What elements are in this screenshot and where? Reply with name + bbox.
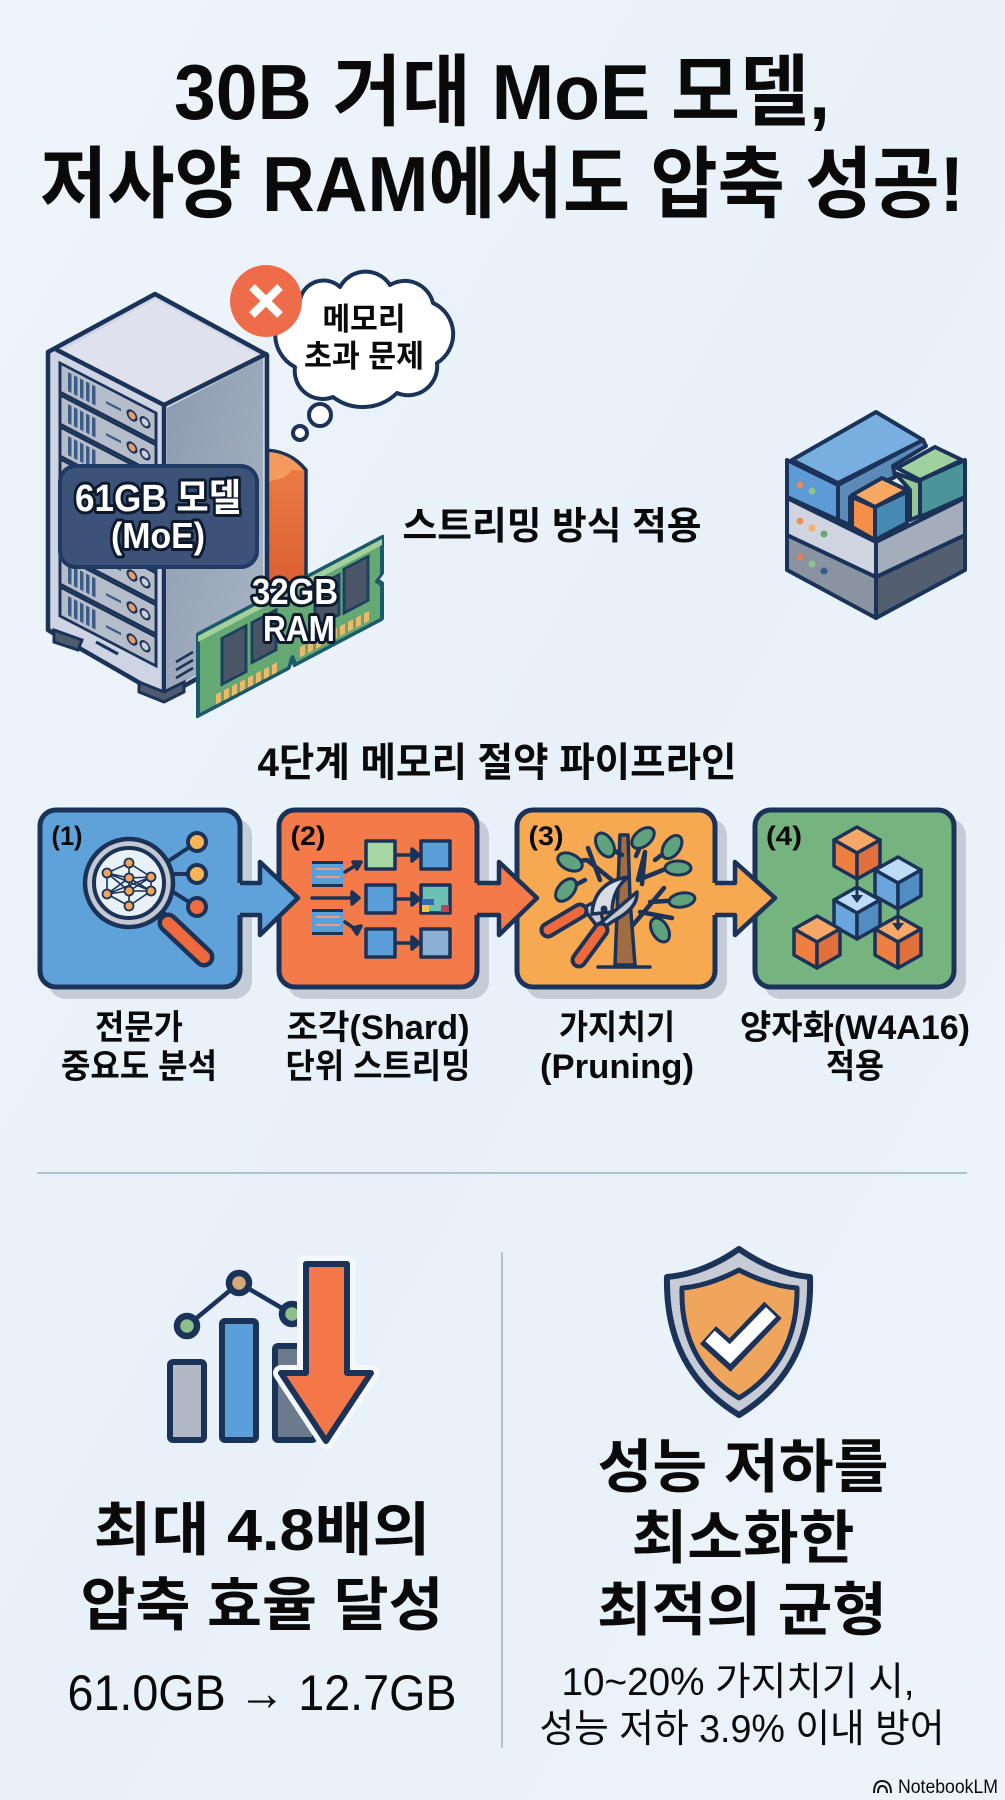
icon: shard streaming	[312, 841, 450, 957]
heading: pipeline: 4단계 메모리 절약 파이프라인	[258, 741, 736, 785]
step 4 panel: (4)	[766, 821, 802, 851]
step labels: 가지치기	[559, 1009, 675, 1047]
step 4 panel	[755, 810, 966, 999]
arrow: step 2 to 3	[473, 862, 537, 935]
step 2 panel	[279, 810, 489, 999]
step labels: 단위 스트리밍	[286, 1048, 470, 1086]
step labels	[61, 1009, 970, 1086]
icon: layered data blocks	[787, 412, 965, 618]
icon: error x	[230, 265, 302, 337]
icon: magnifier with neural net	[85, 833, 206, 957]
stat: performance balance: 최적의 균형	[597, 1578, 887, 1643]
stat: performance balance: 최소화한	[632, 1506, 854, 1571]
icon: shield with check	[667, 1249, 810, 1415]
label: 61GB model	[60, 466, 257, 567]
thought bubble	[275, 272, 453, 440]
label: 61GB model: 61GB 모델	[75, 478, 241, 520]
title	[40, 48, 964, 228]
step labels: 양자화(W4A16)	[740, 1009, 970, 1047]
stat: compression: 압축 효율 달성	[80, 1573, 444, 1638]
icon: bar chart with down arrow	[170, 1255, 371, 1441]
title: 30B 거대 MoE 모델,	[174, 48, 830, 136]
step labels: 조각(Shard)	[286, 1009, 470, 1047]
step 3 panel: (3)	[528, 821, 564, 851]
step 2 panel: (2)	[290, 821, 326, 851]
stat: performance balance: 성능 저하를	[598, 1435, 888, 1500]
stat: performance balance	[540, 1435, 944, 1751]
illustration: server rack	[48, 294, 267, 702]
label: 32GB RAM: RAM	[263, 608, 335, 649]
step labels: 적용	[826, 1048, 884, 1086]
arrow: step 1 to 2	[236, 862, 298, 935]
heading: streaming: 스트리밍 방식 적용	[402, 506, 702, 548]
icon: tree and pruning shears	[548, 824, 696, 967]
illustration: cylinder behind server	[262, 450, 306, 583]
thought bubble: 초과 문제	[304, 339, 424, 374]
step labels: (Pruning)	[540, 1048, 694, 1086]
step 1 panel	[40, 810, 252, 999]
stat: performance balance: 성능 저하 3.9% 이내 방어	[540, 1708, 944, 1751]
stat: compression: 61.0GB → 12.7GB	[68, 1665, 456, 1721]
label: 32GB RAM	[252, 571, 338, 649]
stat: compression: 최대 4.8배의	[94, 1498, 430, 1563]
label: 61GB model: (MoE)	[111, 515, 205, 556]
notebooklm mark: NotebookLM	[898, 1777, 998, 1798]
step 1 panel: (1)	[52, 821, 82, 851]
step labels: 중요도 분석	[61, 1048, 217, 1086]
title: 저사양 RAM에서도 압축 성공!	[40, 140, 964, 228]
label: 32GB RAM: 32GB	[252, 571, 338, 612]
stat: performance balance: 10~20% 가지치기 시,	[562, 1661, 914, 1704]
step 3 panel	[517, 810, 727, 999]
illustration: RAM stick	[198, 537, 382, 716]
server slots	[60, 363, 156, 666]
arrow: step 3 to 4	[711, 862, 775, 935]
stat: compression	[68, 1498, 456, 1721]
thought bubble: 메모리	[322, 302, 406, 337]
step labels: 전문가	[95, 1009, 183, 1047]
icon: quantization cubes	[794, 827, 921, 968]
